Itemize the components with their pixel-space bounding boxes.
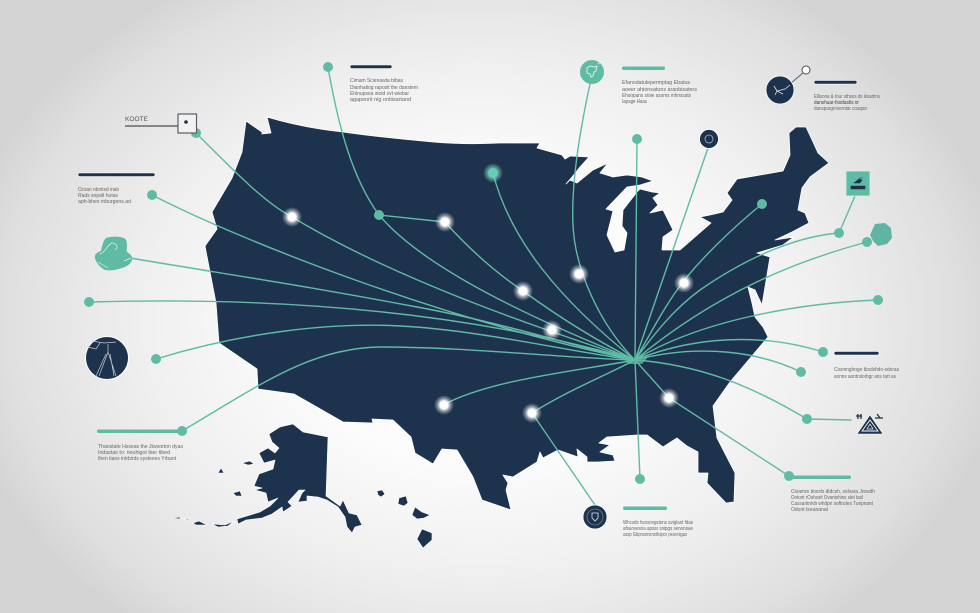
callout: top centre teal icon and text: Efanodatulepermptag Ebatus [622, 80, 690, 86]
callout: lower right text: Odont tseananat [791, 507, 828, 513]
icon: navy circle with legs [86, 336, 128, 380]
icon: teal leaf shape [95, 237, 132, 270]
callout: top centre teal icon and text: Iapage Haas [622, 99, 647, 105]
callout: top right dark icon and text [766, 66, 880, 112]
callout: right navy bar and text: aonns aontrsiorbgr ans tart as [834, 374, 896, 380]
callout: top centre teal icon and text: aoeer ahionsatuns aranbisaters [622, 87, 697, 93]
callout: bottom centre icon and text [583, 505, 693, 538]
callout: top centre teal icon and text [580, 60, 697, 105]
callout: lower left text: Indastas to: rieuhigot bier tibed [98, 450, 170, 456]
icon: teal blob [870, 223, 892, 246]
teal endpoint dots [84, 62, 883, 484]
callout: top right dark icon and text: danspargrnverntar coaqan [814, 106, 867, 112]
callout: KOOTE label [125, 114, 196, 133]
callout: top left text: Ehinupsoa stoid svt wiebar [350, 91, 409, 97]
callout: lower right text: Ootont rOshosit Ovantshins slet tasl [791, 495, 863, 501]
callout: left text [78, 173, 155, 205]
map: Hawaii islands [377, 490, 432, 548]
callout: lower left text: then tians intrbirds systeees Yrbant [98, 456, 176, 462]
callout: top right dark icon and text: danshuar-fsodastis or [814, 100, 859, 106]
map: contiguous United States [205, 117, 829, 510]
callout: top right dark icon and text: Ellisona & tour sthsos ds iksartins [814, 94, 880, 100]
icon: ring marker [700, 130, 718, 148]
callout: top left text [350, 65, 418, 103]
callout: KOOTE label: KOOTE [125, 116, 149, 123]
callout: lower right text: Cassantnivb whdpn softrutes Tuepnant [791, 501, 873, 507]
callout: top left text: agapennt nig ontiisartand [350, 97, 411, 103]
icon: teal square badge [846, 171, 870, 196]
callout: left text: Cirsan rdontsd mab [78, 187, 119, 193]
map: Alaska [173, 424, 362, 533]
callout: bottom centre icon and text: sasp Gbpnsonsnsthspor peuvnigas [623, 532, 687, 538]
glowing city nodes [282, 163, 694, 423]
callout: top centre teal icon and text: Ehoopans sioie asoms mhnssats [622, 93, 691, 99]
callout: left text: aph-bhes mburgens.ad [78, 199, 131, 205]
callout: bottom centre icon and text: afsuovesna apsar snipgs senonoae [623, 526, 693, 532]
callout: right navy bar and text [834, 352, 899, 380]
callout: top left text: Cimam Scienawta bibas [350, 78, 403, 84]
callout: lower left text [97, 430, 183, 462]
callout: left text: Rads snpalt hutas [78, 193, 118, 199]
connector lines network [89, 67, 878, 505]
callout: lower right text: Cioamre tioxsfs dtdcsh, solvara Jnrwdh [791, 489, 875, 495]
icon: triangle emblem [856, 414, 883, 434]
callout: lower left text: Thanstate Hsseas the Jtwsorton dyas [98, 444, 183, 450]
callout: lower right text [789, 476, 875, 513]
callout: top left text: Dianhatiog raposit the danstem [350, 85, 418, 91]
callout: right navy bar and text: Cisonnghoge tbsdshdo-sdoras [834, 367, 899, 373]
callout: bottom centre icon and text: Whcsds hsnsovgstons aviglant fdas [623, 520, 693, 526]
